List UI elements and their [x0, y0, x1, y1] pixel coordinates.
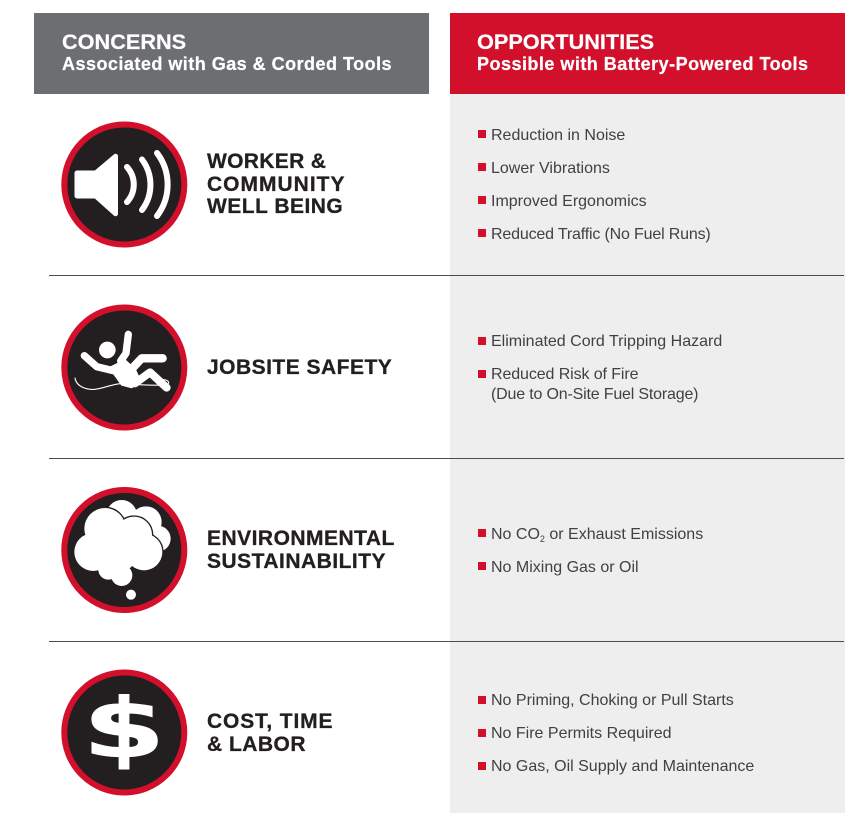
list: jobsite safety opportunities: Reduced Risk of Fire	[491, 366, 638, 383]
list: well being opportunities	[478, 127, 711, 243]
list: well being opportunities: Lower Vibrations	[491, 160, 610, 177]
label: jobsite safety: JOBSITE SAFETY	[207, 356, 392, 379]
subheading: opportunities: Possible with Battery-Powered Tools	[477, 54, 809, 74]
list: cost opportunities: No Fire Permits Required	[491, 725, 672, 742]
list: well being opportunities: Reduced Traffic (No Fuel Runs)	[491, 226, 711, 243]
heading: concerns title: CONCERNS	[62, 29, 186, 54]
label: cost, time and labor: COST, TIME	[207, 710, 333, 733]
header: opportunities	[450, 13, 845, 94]
label: cost, time and labor: & LABOR	[207, 732, 306, 756]
label: worker and community well being: COMMUNITY	[207, 172, 346, 196]
label: environmental sustainability: SUSTAINABILITY	[207, 550, 386, 572]
list: jobsite safety opportunities	[478, 333, 722, 403]
list: environmental opportunities	[478, 526, 703, 576]
panel: opportunities background	[450, 94, 845, 813]
icon: falling worker	[64, 308, 184, 428]
list: jobsite safety opportunities: (Due to On-Site Fuel Storage)	[491, 386, 698, 403]
icon: dollar sign: $	[83, 681, 165, 776]
icon: sound speaker	[64, 124, 184, 244]
icon: cloud of emissions	[64, 490, 184, 610]
label: worker and community well being: WORKER &	[207, 150, 326, 173]
list: jobsite safety opportunities: Eliminated Cord Tripping Hazard	[491, 333, 722, 350]
label: cost, time and labor	[207, 710, 333, 756]
header: concerns	[34, 13, 429, 94]
list: well being opportunities: Improved Ergonomics	[491, 193, 647, 210]
icon: dollar sign	[64, 672, 184, 792]
list: cost opportunities: No Gas, Oil Supply and Maintenance	[491, 758, 754, 775]
label: environmental sustainability: ENVIRONMENTAL	[207, 527, 395, 550]
list: environmental opportunities: No Mixing Gas or Oil	[491, 559, 639, 576]
label: worker and community well being	[206, 150, 346, 218]
heading: opportunities title: OPPORTUNITIES	[477, 29, 654, 54]
label: worker and community well being: WELL BEING	[207, 195, 343, 218]
list: cost opportunities: No Priming, Choking or Pull Starts	[491, 692, 734, 709]
label: environmental sustainability	[207, 527, 395, 572]
list: well being opportunities: Reduction in Noise	[491, 127, 625, 144]
list: environmental opportunities: No CO2 or Exhaust Emissions	[491, 526, 703, 544]
subheading: concerns: Associated with Gas & Corded Tools	[62, 54, 392, 74]
list: cost opportunities	[478, 692, 754, 775]
